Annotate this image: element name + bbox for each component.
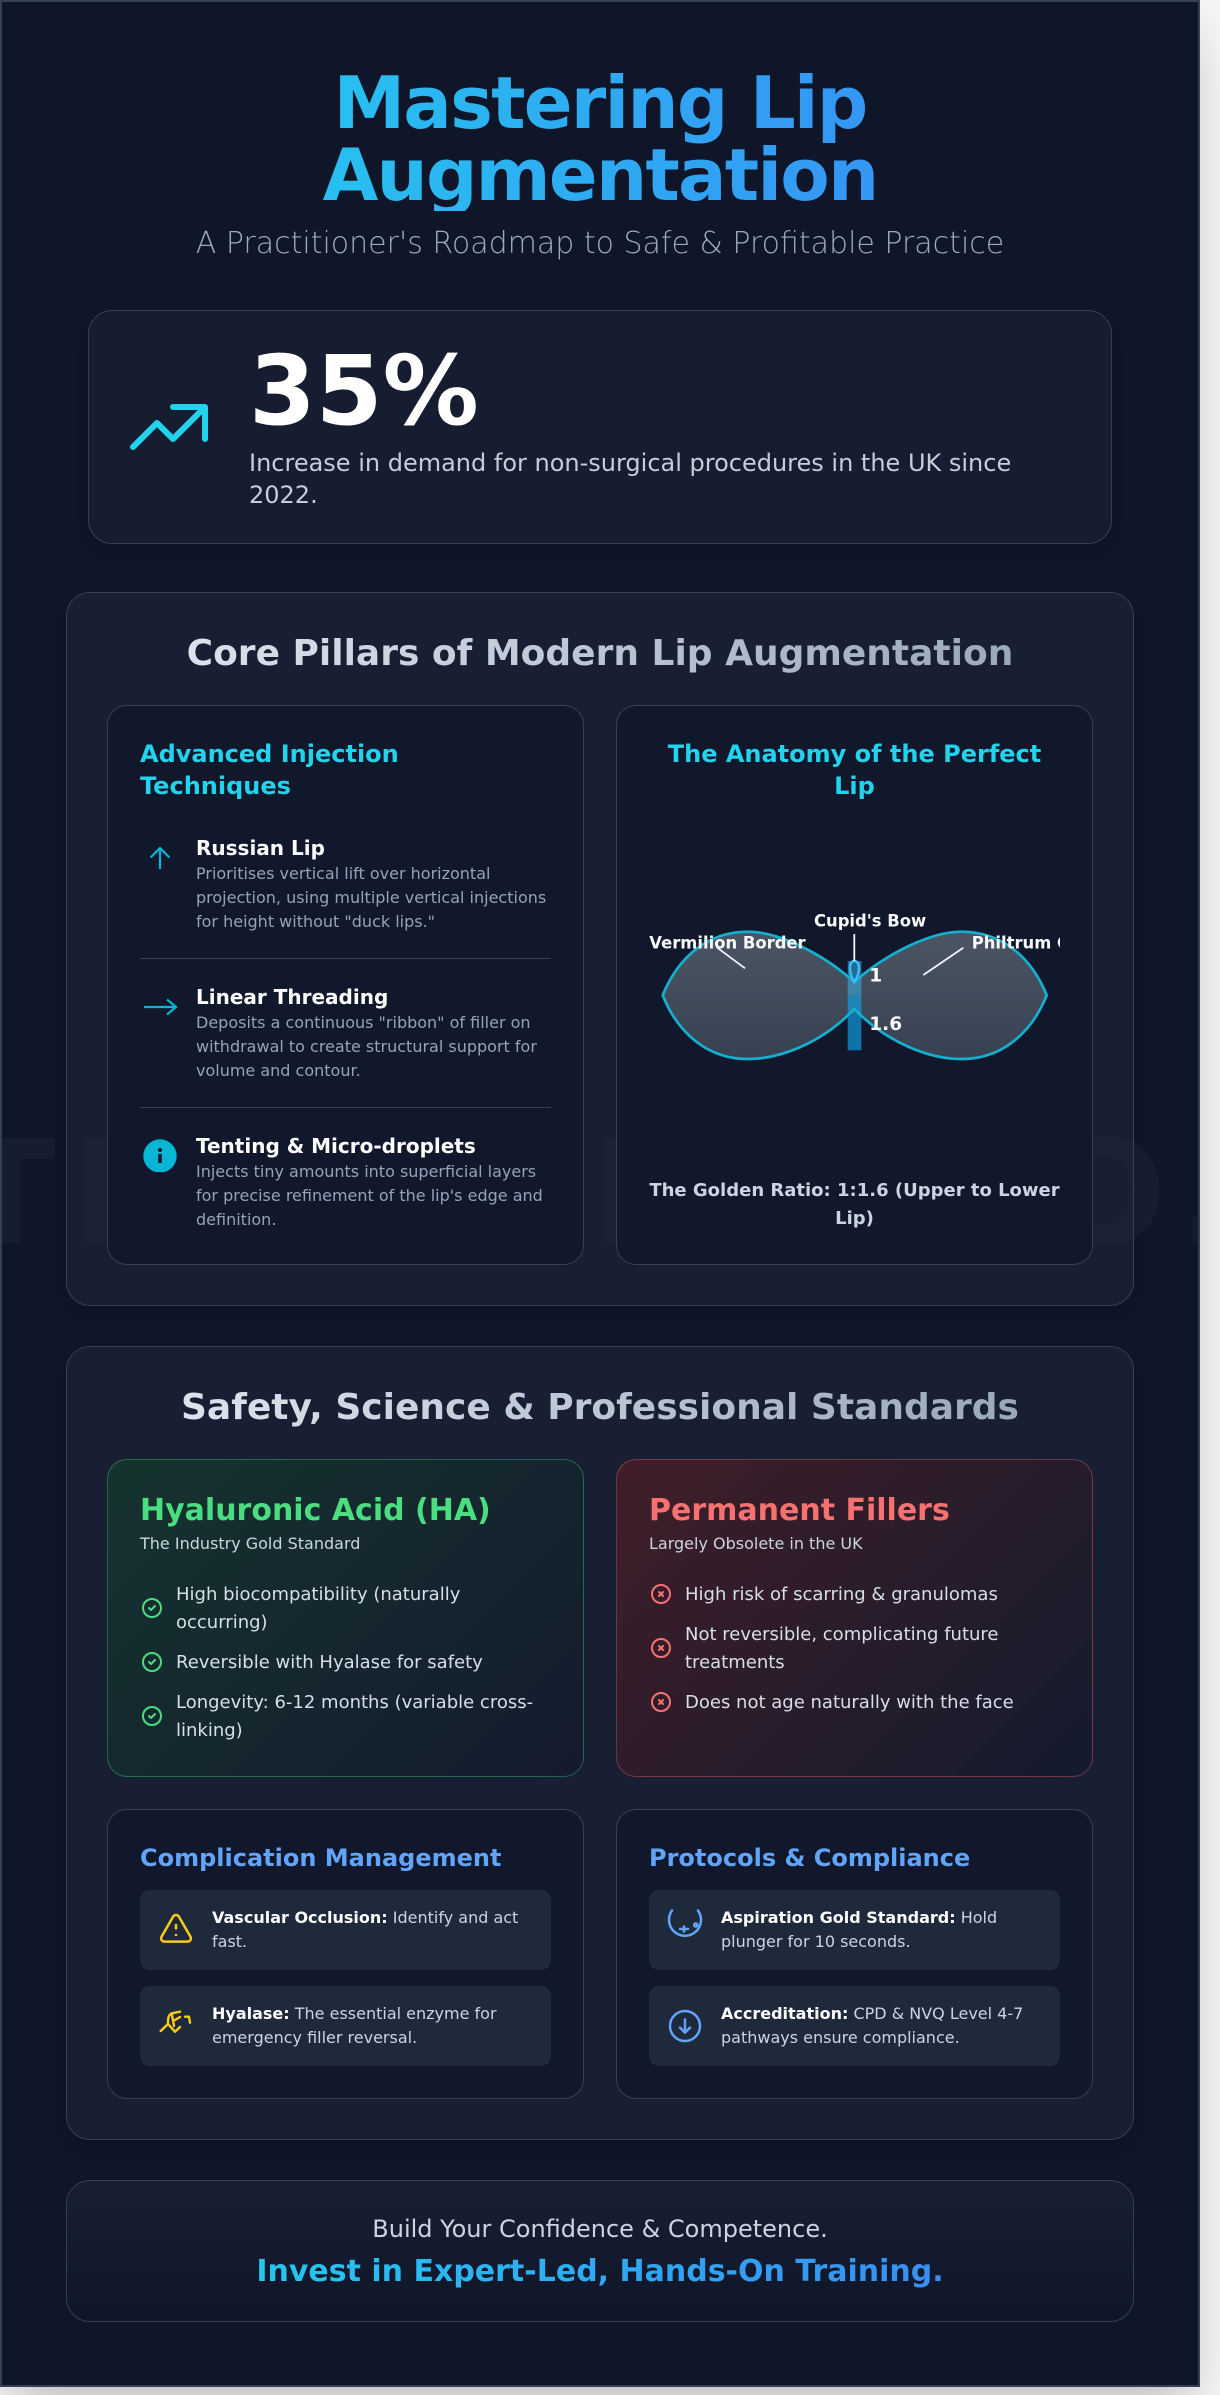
icon: down arrow circle: [668, 2010, 702, 2042]
panel: anatomy of the perfect lip: [616, 705, 1093, 1265]
diagram: lip anatomy: Cupid's Bow: [814, 912, 926, 931]
icon: right arrow: [144, 998, 178, 1016]
heading: core pillars: Core Pillars of Modern Lip Augmentation: [187, 633, 1013, 674]
benefit: reversible: Reversible with Hyalase for safety: [176, 1652, 483, 1673]
card: vascular occlusion: Vascular Occlusion: Identify and act fast.: [212, 1908, 518, 1951]
diagram: lip anatomy: 1: [869, 966, 882, 987]
technique: Linear Threading: Deposits a continuous "ribbon" of filler on withdrawal to create structural support for volume and contour.: [196, 1013, 537, 1080]
card: accreditation: Accreditation: CPD & NVQ Level 4-7 pathways ensure compliance.: [721, 2004, 1023, 2047]
diagram: lip anatomy: 1.6: [869, 1014, 902, 1035]
panel: hyaluronic acid: [107, 1459, 584, 1777]
panel: complication management: [107, 1809, 584, 2099]
big number: 35%: [249, 335, 479, 447]
icon: trending up arrow: [130, 404, 208, 450]
call to action line: Build Your Confidence & Competence.: [372, 2215, 828, 2243]
call to action highlight: Invest in Expert-Led, Hands-On Training.: [256, 2254, 944, 2289]
risk: scarring: High risk of scarring & granulomas: [685, 1584, 998, 1605]
heading: techniques: Advanced Injection Techniques: [140, 740, 399, 800]
title: Augmentation: [323, 133, 877, 217]
heading: hyaluronic acid: Hyaluronic Acid (HA): [140, 1493, 491, 1528]
panel: safety, science and standards: [66, 1346, 1134, 2140]
technique: Linear Threading: [140, 959, 551, 1108]
technique: Russian Lip: Russian Lip: [196, 836, 325, 860]
technique: Russian Lip: Prioritises vertical lift over horizontal projection, using multiple vertical injections for height without "duck lips.": [196, 864, 546, 931]
icon: hyalase enzyme: [159, 2010, 192, 2033]
call to action highlight: [99, 2254, 1101, 2290]
card: aspiration: [649, 1890, 1060, 1970]
heading: permanent fillers: Permanent Fillers: [649, 1493, 950, 1528]
management columns: [107, 1809, 1093, 2099]
panel: 35% statistic: [88, 310, 1112, 544]
icon: warning triangle: [160, 1914, 192, 1943]
heading: complication management: Complication Management: [140, 1844, 501, 1872]
card: aspiration: Aspiration Gold Standard: Hold plunger for 10 seconds.: [721, 1908, 997, 1951]
core pillars columns: [107, 705, 1093, 1265]
subtitle: A Practitioner's Roadmap to Safe & Profitable Practice: [196, 226, 1004, 261]
heading: protocols: Protocols & Compliance: [649, 1844, 970, 1872]
panel: core pillars: [66, 592, 1134, 1306]
subheading: gold standard: The Industry Gold Standard: [140, 1534, 360, 1553]
subheading: obsolete: Largely Obsolete in the UK: [649, 1534, 863, 1553]
diagram: lip anatomy: Vermilion Border: [649, 933, 807, 952]
technique: Tenting & Micro-droplets: Injects tiny amounts into superficial layers for precise refinement of the lip's edge and definition.: [196, 1162, 543, 1229]
risk: ageing: Does not age naturally with the face: [685, 1692, 1014, 1713]
panel: permanent fillers: [616, 1459, 1093, 1777]
comparison columns: [107, 1459, 1093, 1777]
statistic description: Increase in demand for non-surgical procedures in the UK since 2022.: [249, 449, 1011, 509]
technique: Russian Lip: [140, 834, 551, 959]
card: accreditation: [649, 1986, 1060, 2066]
panel: advanced injection techniques: [107, 705, 584, 1265]
technique: Tenting & Micro-droplets: [143, 1134, 543, 1229]
icon: up arrow: [150, 846, 170, 869]
benefit: longevity: Longevity: 6-12 months (variable cross-linking): [176, 1692, 533, 1741]
icon: info circle: [143, 1139, 177, 1172]
card: vascular occlusion: [140, 1890, 551, 1970]
risk: not reversible: Not reversible, complicating future treatments: [685, 1624, 998, 1673]
card: hyalase: Hyalase: The essential enzyme for emergency filler reversal.: [212, 2004, 497, 2047]
title: Mastering Lip: [333, 61, 867, 145]
card: hyalase: [140, 1986, 551, 2066]
panel: protocols and compliance: [616, 1809, 1093, 2099]
diagram: lip anatomy: [649, 912, 1060, 1060]
technique: Linear Threading: Linear Threading: [196, 985, 388, 1009]
panel: call to action: [66, 2180, 1134, 2322]
heading: anatomy: The Anatomy of the Perfect Lip: [668, 740, 1041, 800]
benefit: biocompatibility: High biocompatibility (naturally occurring): [176, 1584, 460, 1633]
icon: aspiration: [668, 1909, 702, 1938]
technique: Tenting & Micro-droplets: Tenting & Micro-droplets: [196, 1134, 476, 1158]
caption: golden ratio: The Golden Ratio: 1:1.6 (Upper to Lower Lip): [649, 1180, 1060, 1229]
title: [66, 67, 1134, 211]
statistic text: [249, 335, 1011, 509]
heading: safety: Safety, Science & Professional Standards: [181, 1387, 1019, 1428]
